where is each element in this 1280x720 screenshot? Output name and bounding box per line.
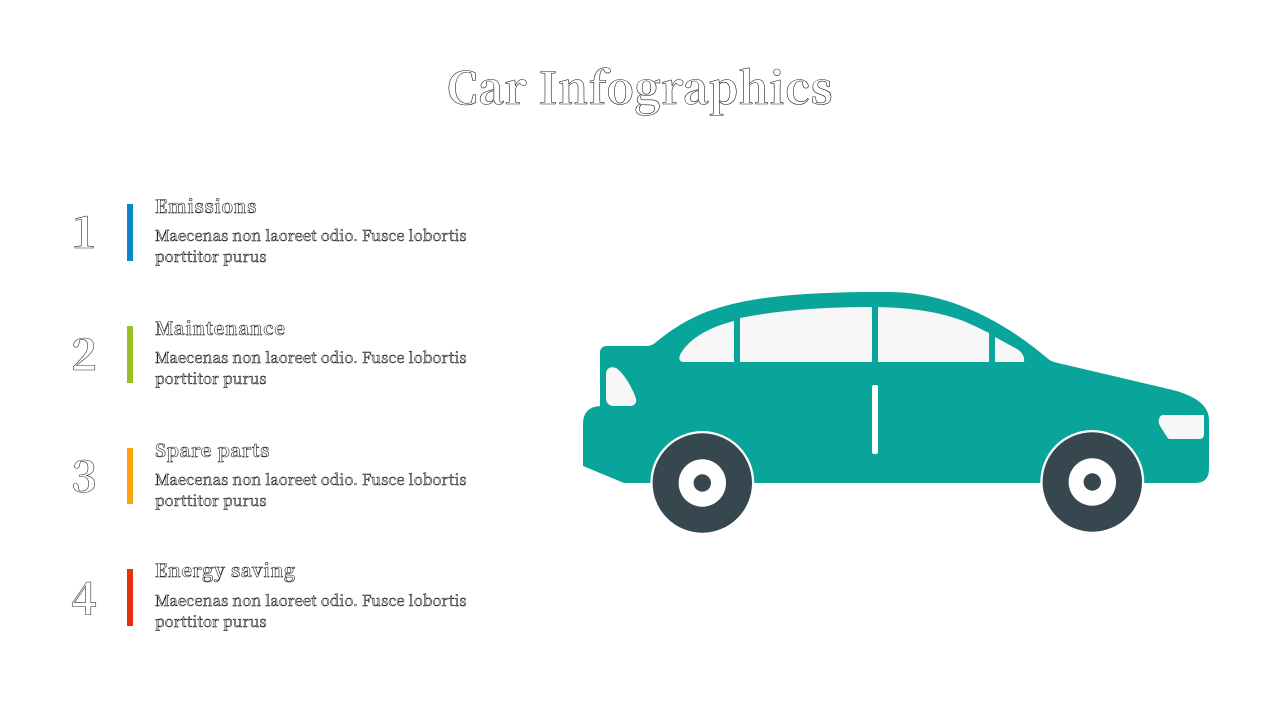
text: emissions: porttitor purus [155, 246, 267, 267]
number 2: 2 [71, 319, 97, 383]
number 1: 1 [71, 197, 97, 261]
text: emissions: Maecenas non laoreet odio. Fusce lobortis [155, 225, 467, 246]
front quarter window [995, 337, 1024, 362]
heading: energy saving: Energy saving [155, 557, 296, 583]
text: energy saving [155, 590, 467, 632]
heading: spare parts: Spare parts [155, 437, 270, 463]
rear quarter window [679, 321, 734, 362]
door gap [872, 385, 878, 454]
title: Car Infographics [447, 53, 833, 117]
text: spare parts: Maecenas non laoreet odio. Fusce lobortis [155, 469, 467, 490]
item 1: emissions [71, 193, 467, 267]
text: spare parts [155, 469, 467, 511]
headlight [1159, 415, 1204, 439]
text: maintenance [155, 347, 467, 389]
rear wheel [650, 431, 754, 535]
item 2: maintenance [71, 315, 467, 389]
text: spare parts: porttitor purus [155, 490, 267, 511]
text: energy saving: Maecenas non laoreet odio. Fusce lobortis [155, 590, 467, 611]
front door window [878, 307, 989, 362]
rear door window [740, 307, 872, 362]
item 3: spare parts [71, 437, 467, 511]
number 4: 4 [71, 563, 97, 627]
car body [583, 292, 1209, 483]
blue bar [127, 204, 133, 261]
front wheel [1040, 430, 1144, 534]
green bar [127, 326, 133, 383]
text: maintenance: porttitor purus [155, 368, 267, 389]
heading: maintenance: Maintenance [155, 315, 286, 341]
orange bar [127, 448, 133, 504]
number 3: 3 [71, 441, 97, 505]
text: maintenance: Maecenas non laoreet odio. Fusce lobortis [155, 347, 467, 368]
tail light [606, 367, 636, 406]
heading: emissions: Emissions [155, 193, 257, 219]
red bar [127, 569, 133, 626]
text: emissions [155, 225, 467, 267]
text: energy saving: porttitor purus [155, 611, 267, 632]
item 4: energy saving [71, 557, 467, 632]
